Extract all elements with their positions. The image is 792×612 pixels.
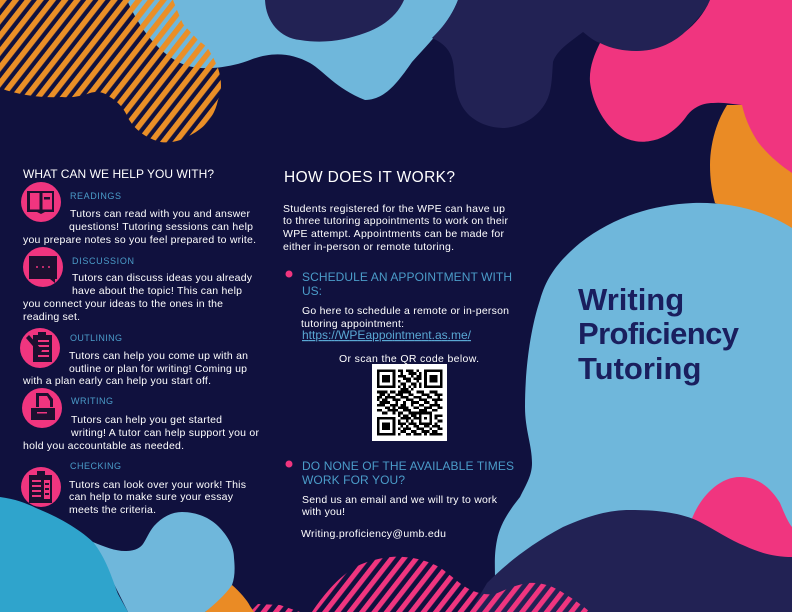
blob: lower right dark [470, 510, 792, 612]
blob: top right pink [590, 0, 792, 173]
text: scan prompt: Or scan the QR code below. [339, 353, 479, 365]
text: how it works introduction: to three tutoring appointments to work on their [283, 215, 508, 227]
text: checking description: Tutors can look over your work! This [69, 479, 246, 491]
subheading: none of the times work: DO NONE OF THE AVAILABLE TIMES [302, 459, 514, 473]
text: outlining description: Tutors can help you come up with an [69, 350, 248, 362]
icon: writing file box [22, 388, 62, 428]
subheading: outlining: OUTLINING [70, 333, 122, 343]
subheading: none of the times work: WORK FOR YOU? [302, 473, 405, 487]
text: readings description: you prepare notes so you feel prepared to write. [23, 234, 256, 246]
subheading: readings: READINGS [70, 191, 121, 201]
blob: bottom left light blue [93, 512, 235, 612]
text: checking description [69, 479, 246, 516]
subheading: schedule an appointment [302, 270, 512, 298]
blob: bottom left cyan [0, 497, 128, 612]
text: how it works introduction: either in-person or remote tutoring. [283, 241, 454, 253]
text: email prompt: Send us an email and we will try to work [302, 494, 498, 506]
title: Writing [578, 282, 684, 317]
text: writing description: writing! A tutor can help support you or [70, 427, 260, 439]
text: checking description: meets the criteria. [69, 504, 156, 516]
subheading: discussion: DISCUSSION [72, 256, 134, 266]
link: appointment url: https://WPEappointment.as.me/ [302, 328, 472, 342]
text: outlining description [22, 350, 248, 387]
subheading: schedule an appointment: SCHEDULE AN APPOINTMENT WITH [302, 270, 512, 284]
blob: big light blue panel [495, 203, 792, 612]
text: discussion description: reading set. [23, 311, 80, 323]
heading: what can we help you with: WHAT CAN WE HELP YOU WITH? [23, 167, 214, 181]
icon: outlining clipboard [20, 328, 60, 368]
text: schedule instructions [301, 305, 509, 330]
blob: right orange [710, 105, 792, 230]
text: readings description: Tutors can read with you and answer [70, 208, 250, 220]
text: readings description: questions! Tutoring sessions can help [69, 221, 253, 233]
text: writing description: Tutors can help you get started [71, 414, 222, 426]
text: how it works introduction: WPE attempt. Appointments can be made for [283, 228, 504, 240]
text: discussion description: you connect your ideas to the ones in the [23, 298, 223, 310]
blob: top centre dark [265, 0, 404, 42]
bullet: no times [286, 460, 292, 468]
subheading: checking: CHECKING [70, 461, 121, 471]
icon: checking checklist [21, 467, 61, 507]
panel: how does it work [283, 169, 514, 540]
blob: top light blue [127, 0, 458, 100]
text: readings description [23, 208, 256, 246]
blob: lower right pink [690, 477, 792, 565]
text: schedule instructions: tutoring appointment: [301, 318, 404, 330]
text: writing description [23, 414, 260, 452]
text: discussion description: have about the topic! This can help [72, 285, 242, 297]
subheading: writing: WRITING [71, 396, 113, 406]
subheading: schedule an appointment: US: [302, 284, 322, 298]
heading: how does it work: HOW DOES IT WORK? [284, 169, 455, 186]
text: checking description: can help to make sure your essay [69, 491, 234, 503]
text: how it works introduction: Students registered for the WPE can have up [283, 203, 505, 215]
panel: what can we help you with [20, 167, 260, 516]
text: outlining description: outline or plan for writing! Coming up [69, 363, 247, 375]
subheading: none of the times work [302, 459, 514, 487]
text: discussion description [23, 272, 253, 323]
title [578, 282, 740, 386]
bullet: schedule [286, 270, 292, 278]
blob: bottom pink striped [250, 557, 590, 612]
text: email prompt: with you! [301, 506, 345, 518]
text: discussion description: Tutors can discuss ideas you already [72, 272, 253, 284]
QR code [372, 364, 447, 441]
icon: discussion speech bubble [23, 247, 63, 287]
text: schedule instructions: Go here to schedule a remote or in-person [302, 305, 509, 317]
blob: bottom left orange [205, 585, 254, 612]
icon: readings book [21, 182, 61, 222]
title: Proficiency [578, 316, 740, 351]
blob: top left orange striped [0, 0, 221, 142]
title: Tutoring [578, 351, 701, 386]
text: email prompt [301, 494, 498, 518]
text: how it works introduction [283, 203, 508, 253]
text: writing description: hold you accountable as needed. [23, 440, 184, 452]
text: email address: Writing.proficiency@umb.edu [301, 528, 446, 540]
text: outlining description: with a plan early can help you start off. [22, 375, 211, 387]
blob: top right dark [432, 0, 710, 128]
